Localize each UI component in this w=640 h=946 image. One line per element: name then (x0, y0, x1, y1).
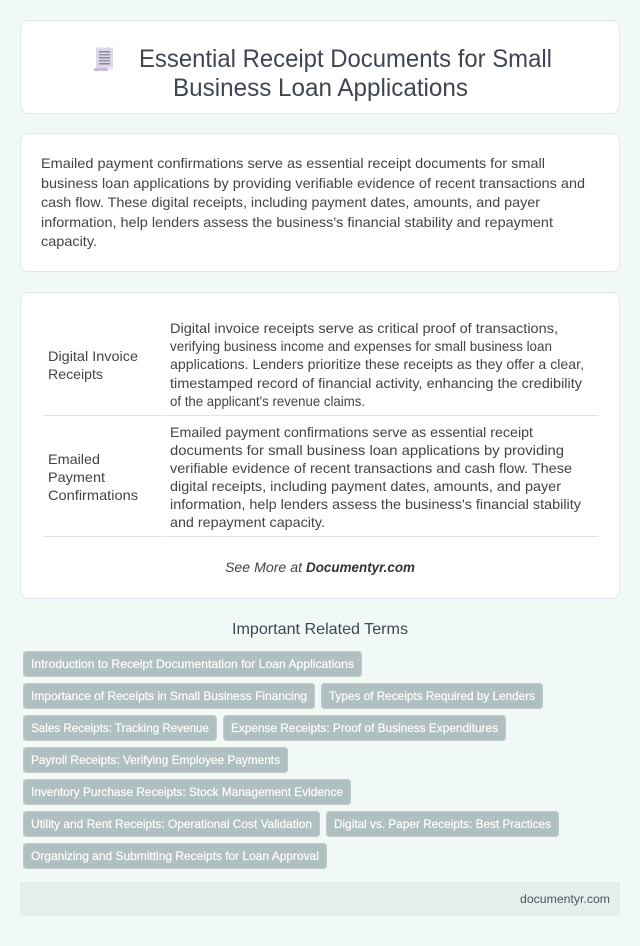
related terms tags: Introduction to Receipt Documentation for Loan Applications (31, 657, 354, 671)
row: emailed payment confirmations: verifiable evidence of recent transactions and cash flow. These (170, 460, 572, 476)
row: emailed payment confirmations: and repayment capacity. (170, 514, 325, 530)
intro text card: cash flow. These digital receipts, including payment dates, amounts, and payer (41, 194, 540, 210)
row: digital invoice receipts: Digital invoice receipts serve as critical proof of transactions, (170, 320, 558, 336)
related terms tags: Importance of Receipts in Small Business Financing (31, 689, 307, 703)
title: Business Loan Applications (173, 74, 468, 102)
row: emailed payment confirmations: Emailed payment confirmations serve as essential receipt (170, 424, 533, 440)
related terms tags: Payroll Receipts: Verifying Employee Payments (31, 753, 280, 767)
row: digital invoice receipts: timestamped record of financial activity, enhancing the credibility (170, 375, 582, 391)
header card (20, 20, 620, 114)
see more link (225, 559, 415, 575)
related terms tags: Digital vs. Paper Receipts: Best Practices (334, 817, 551, 831)
row: digital invoice receipts: Receipts (48, 366, 103, 382)
related terms tags: Expense Receipts: Proof of Business Expenditures (231, 721, 498, 735)
related terms tags: Sales Receipts: Tracking Revenue (31, 721, 209, 735)
intro text card: information, help lenders assess the business's financial stability and repayment (41, 214, 553, 230)
related terms tags: Utility and Rent Receipts: Operational Cost Validation (31, 817, 312, 831)
related terms heading: Important Related Terms (232, 621, 408, 638)
title (139, 45, 552, 102)
row: digital invoice receipts: verifying business income and expenses for small business loan (170, 338, 552, 354)
related terms tags: Types of Receipts Required by Lenders (329, 689, 535, 703)
intro text card (20, 134, 620, 272)
related terms tags: Inventory Purchase Receipts: Stock Management Evidence (31, 785, 343, 799)
row: digital invoice receipts (48, 320, 584, 409)
table card (20, 292, 620, 916)
row: digital invoice receipts: applications. Lenders prioritize these receipts as they offer a clear, (170, 356, 584, 372)
footer: documentyr.com (520, 892, 610, 906)
row: emailed payment confirmations: digital receipts, including payment dates, amounts, and payer (170, 478, 561, 494)
row: emailed payment confirmations: Emailed (48, 451, 100, 467)
intro text card: Emailed payment confirmations serve as essential receipt documents for small (41, 155, 545, 171)
icon: receipt (94, 47, 113, 71)
row: digital invoice receipts: of the applicant's revenue claims. (170, 393, 365, 409)
see more link: Documentyr.com (306, 559, 415, 575)
related terms tags (24, 652, 558, 868)
row: emailed payment confirmations: Payment (48, 469, 105, 485)
related terms tags: Organizing and Submitting Receipts for Loan Approval (31, 849, 319, 863)
see more link: See More at (225, 559, 303, 575)
intro text card: business loan applications by providing verifiable evidence of recent transactions and (41, 175, 585, 191)
row: digital invoice receipts: Digital Invoice (48, 348, 138, 364)
row: emailed payment confirmations: documents for small business loan applications by providing (170, 442, 564, 458)
row: emailed payment confirmations: information, help lenders assess the business's financial stability (170, 496, 581, 512)
intro text card: capacity. (41, 233, 97, 249)
footer (20, 882, 620, 916)
row: emailed payment confirmations (48, 424, 581, 530)
row: emailed payment confirmations: Confirmations (48, 487, 138, 503)
title: Essential Receipt Documents for Small (139, 45, 552, 73)
